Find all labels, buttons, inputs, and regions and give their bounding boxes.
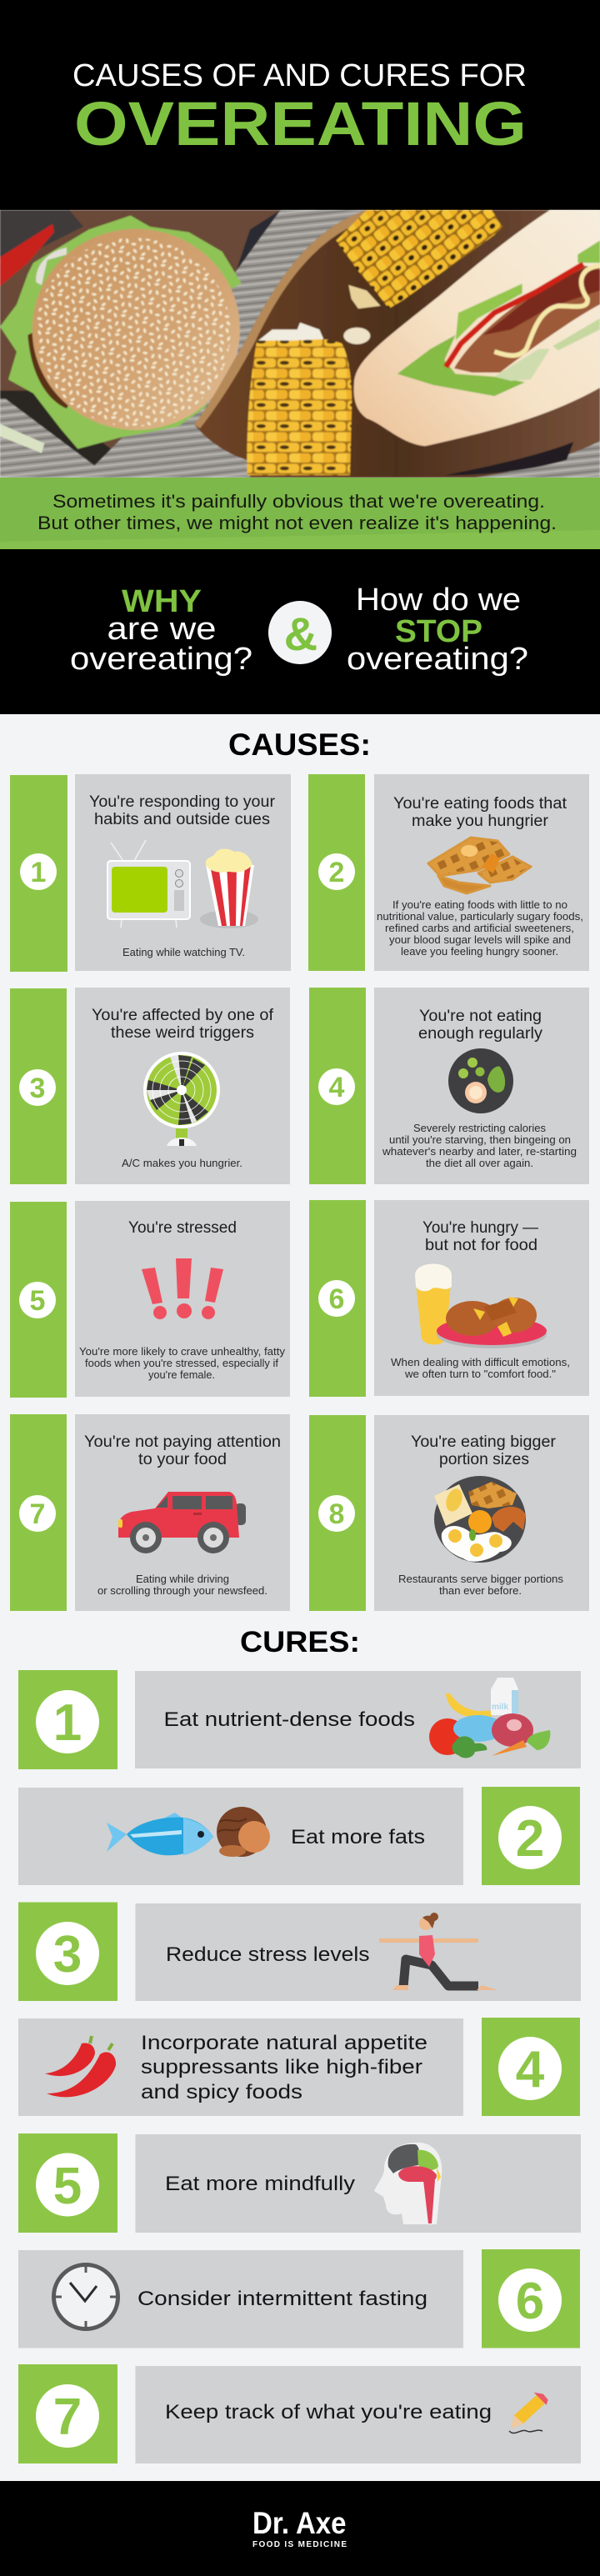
icon: clock <box>53 2264 118 2329</box>
number 2: 2 <box>329 857 344 888</box>
cure 1 <box>18 1670 581 1769</box>
heading: habits and outside cues <box>94 811 270 828</box>
question: why: WHY <box>122 584 202 619</box>
number 5: 5 <box>30 1285 45 1317</box>
cause 7 <box>10 1414 290 1611</box>
number: 1 <box>53 1694 82 1752</box>
caption: Restaurants serve bigger portions <box>398 1573 563 1585</box>
cure 4 <box>18 2018 580 2116</box>
heading <box>84 1433 281 1468</box>
caption <box>377 898 583 958</box>
heading <box>418 1008 543 1043</box>
burger on board <box>0 210 281 466</box>
heading: cures: CURES: <box>240 1626 360 1658</box>
icon: chillies <box>45 2036 116 2097</box>
heading <box>422 1219 538 1254</box>
caption: refined carbs and artificial sweeteners, <box>385 922 574 934</box>
title line: CAUSES OF AND CURES FOR <box>72 58 527 93</box>
icon: walnut <box>217 1807 270 1857</box>
question: why: are we <box>107 612 217 647</box>
cure text: Eat more mindfully <box>165 2173 355 2195</box>
number: 7 <box>53 2388 82 2446</box>
number <box>498 1806 562 1869</box>
cure text: Keep track of what you're eating <box>165 2401 492 2423</box>
heading <box>393 795 568 830</box>
caption: Severely restricting calories <box>413 1122 546 1134</box>
heading: You're responding to your <box>89 793 276 811</box>
question: how: overeating? <box>347 642 528 677</box>
heading <box>411 1433 557 1468</box>
cure text: Eat nutrient-dense foods <box>163 1708 415 1731</box>
icon: chicken plate <box>437 1297 547 1348</box>
header <box>0 0 600 210</box>
caption: than ever before. <box>439 1584 522 1597</box>
icon: head and brain <box>374 2143 442 2224</box>
cure text: Consider intermittent fasting <box>138 2288 428 2310</box>
icon: healthy foods <box>429 1678 550 1758</box>
heading: enough regularly <box>418 1025 543 1043</box>
caption: When dealing with difficult emotions, <box>391 1356 570 1368</box>
cause 2 <box>308 774 589 971</box>
cause 8 <box>309 1415 589 1611</box>
heading: You're not paying attention <box>84 1433 281 1451</box>
number 5 <box>19 1282 56 1318</box>
ampersand badge: & <box>284 608 318 660</box>
cause 3 <box>10 988 290 1184</box>
number <box>498 2037 562 2100</box>
heading: these weird triggers <box>111 1024 254 1042</box>
number 6 <box>318 1280 355 1317</box>
cause 4 <box>309 988 589 1184</box>
caption: you're female. <box>148 1368 215 1381</box>
cure text <box>141 2032 428 2103</box>
number <box>498 2268 562 2332</box>
cure 2 <box>18 1787 580 1885</box>
footer <box>0 2481 600 2576</box>
question: how: STOP <box>395 614 482 649</box>
caption: Eating while driving <box>136 1573 229 1585</box>
question: how: How do we <box>356 583 521 618</box>
caption: nutritional value, particularly sugary foods, <box>377 910 583 923</box>
caption: or scrolling through your newsfeed. <box>98 1584 268 1597</box>
number 7: 7 <box>30 1498 45 1530</box>
number 4: 4 <box>329 1072 345 1103</box>
caption <box>79 1345 286 1381</box>
caption: leave you feeling hungry sooner. <box>401 945 558 958</box>
icon: tv <box>108 840 190 928</box>
icon: fan <box>143 1052 220 1146</box>
tagline: FOOD IS MEDICINE <box>252 2540 347 2549</box>
cure 3 <box>18 1902 581 2001</box>
corn and hot dog <box>247 210 600 475</box>
icon: small plate <box>448 1048 513 1113</box>
number 7 <box>19 1495 56 1532</box>
wooden plate <box>194 210 600 478</box>
caption <box>391 1356 570 1380</box>
cure text: Reduce stress levels <box>166 1943 370 1966</box>
cure 5 <box>18 2133 581 2233</box>
cure text: Eat more fats <box>291 1826 425 1848</box>
number 8 <box>318 1495 355 1532</box>
title: overeating: OVEREATING <box>74 89 527 158</box>
caption <box>98 1573 268 1597</box>
heading: You're affected by one of <box>92 1007 274 1024</box>
number: 4 <box>516 2041 545 2098</box>
heading: You're eating foods that <box>393 795 568 813</box>
cause 6 <box>309 1200 589 1397</box>
heading: portion sizes <box>439 1451 529 1468</box>
plate rim <box>194 210 371 428</box>
heading: You're hungry — <box>422 1219 538 1237</box>
heading: You're eating bigger <box>411 1433 557 1451</box>
number 1: 1 <box>31 857 46 888</box>
caption: the diet all over again. <box>426 1157 533 1169</box>
heading <box>89 793 276 828</box>
questions section <box>0 549 600 714</box>
number 2 <box>318 853 355 890</box>
number <box>36 2153 99 2217</box>
cure text: and spicy foods <box>141 2081 302 2103</box>
heading: You're not eating <box>419 1008 542 1025</box>
icon: popcorn <box>200 848 258 928</box>
logo: dr. axe: Dr. Axe <box>252 2506 347 2540</box>
number 8: 8 <box>329 1498 344 1530</box>
caption <box>398 1573 563 1597</box>
icon: breakfast plate <box>434 1476 526 1563</box>
heading: but not for food <box>425 1237 538 1254</box>
heading: You're stressed <box>128 1219 237 1237</box>
number: 6 <box>516 2273 544 2330</box>
food photo <box>0 210 600 478</box>
icon: waffles <box>428 838 531 893</box>
heading <box>92 1007 274 1042</box>
caption: we often turn to "comfort food." <box>404 1368 556 1380</box>
cure 7 <box>18 2364 581 2463</box>
icon: healthy foods: milk <box>492 1703 508 1712</box>
intro line 2: But other times, we might not even realize it's happening. <box>38 513 557 533</box>
question: why <box>70 584 252 677</box>
cure 6 <box>18 2249 580 2348</box>
caption <box>382 1122 577 1169</box>
heading: to your food <box>138 1451 227 1468</box>
intro line 1: Sometimes it's painfully obvious that we're overeating. <box>52 491 545 512</box>
icon: pencil <box>509 2393 547 2433</box>
caption: Eating while watching TV. <box>122 946 245 958</box>
number <box>36 1690 99 1753</box>
icon: fish <box>107 1813 213 1855</box>
heading: causes: CAUSES: <box>228 728 371 762</box>
caption: foods when you're stressed, especially if <box>85 1357 278 1369</box>
number 3: 3 <box>30 1073 45 1104</box>
cause 1 <box>10 774 291 972</box>
cause 5 <box>10 1201 290 1398</box>
heading: make you hungrier <box>412 813 549 830</box>
icon: yoga woman <box>379 1913 498 1990</box>
caption: until you're starving, then bingeing on <box>389 1133 571 1146</box>
number 6: 6 <box>329 1283 344 1315</box>
caption: your blood sugar levels will spike and <box>389 933 571 946</box>
number <box>36 2384 99 2448</box>
question: why: overeating? <box>70 642 252 677</box>
icon: red car <box>118 1492 246 1553</box>
ampersand badge <box>268 601 332 664</box>
caption: If you're eating foods with little to no <box>392 898 568 911</box>
cure text: suppressants like high-fiber <box>141 2056 422 2078</box>
caption: You're more likely to crave unhealthy, fatty <box>79 1345 286 1358</box>
green intro band <box>0 478 600 549</box>
caption: A/C makes you hungrier. <box>122 1157 242 1169</box>
cure text: Incorporate natural appetite <box>141 2032 428 2054</box>
number: 5 <box>53 2158 82 2215</box>
number 3 <box>19 1069 56 1106</box>
number 1 <box>20 853 57 890</box>
question: how <box>347 583 528 677</box>
caption: whatever's nearby and later, re-starting <box>382 1145 577 1158</box>
number 4 <box>318 1068 355 1105</box>
icon: beer <box>415 1263 452 1345</box>
number <box>36 1922 99 1985</box>
icon: exclamation marks <box>142 1258 223 1319</box>
number: 2 <box>516 1810 544 1868</box>
number: 3 <box>53 1926 82 1983</box>
